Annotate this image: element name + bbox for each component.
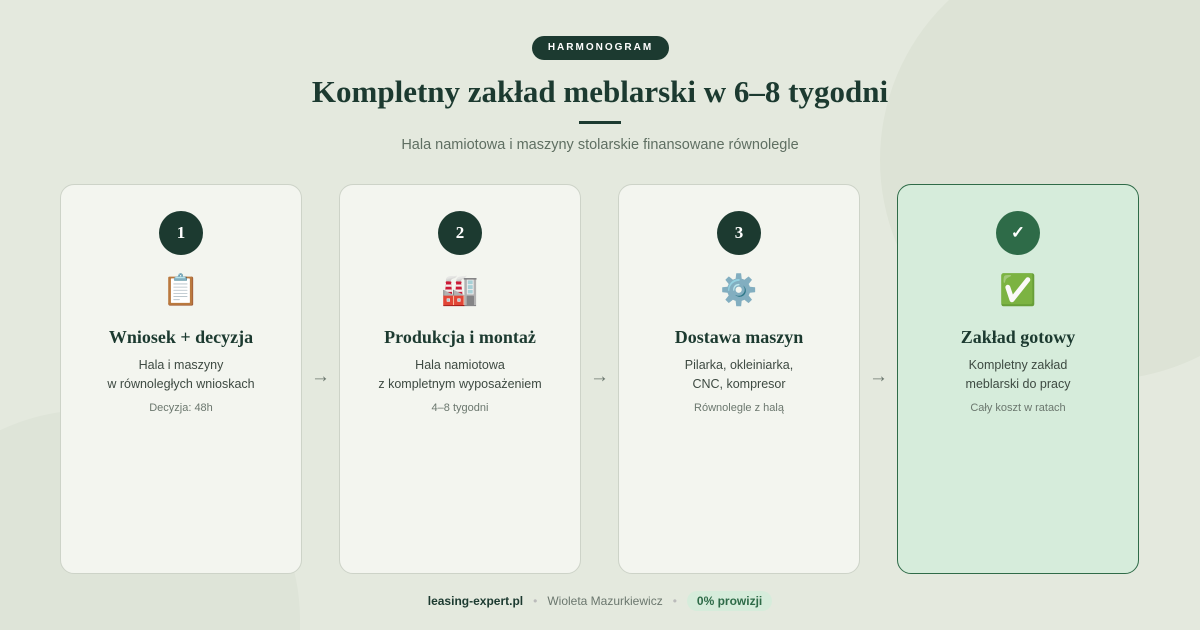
- badge: [532, 36, 669, 60]
- panel: step 3: Dostawa maszyn: [675, 327, 803, 347]
- panel: step 2: [339, 184, 581, 574]
- footer: [428, 591, 772, 611]
- panel: step 2: 4–8 tygodni: [432, 402, 488, 414]
- panel: step 3: 3: [735, 223, 743, 242]
- footer: leasing-expert.pl • Wioleta Mazurkiewicz •: [428, 594, 677, 608]
- panel: step 1: w równoległych wnioskach: [107, 377, 255, 391]
- arrow: →: [311, 366, 330, 387]
- panel: done: Zakład gotowy: [961, 327, 1075, 347]
- panel: step 2: 🏭: [441, 274, 479, 307]
- panel: step 2: Produkcja i montaż: [384, 327, 536, 347]
- footer: 0% prowizji: [697, 594, 762, 608]
- panel: step 3: ⚙️: [720, 274, 758, 307]
- badge: HARMONOGRAM: [548, 42, 653, 53]
- panel: done: meblarski do pracy: [966, 377, 1070, 391]
- subtitle: Hala namiotowa i maszyny stolarskie finansowane równolegle: [401, 137, 799, 153]
- panel: step 1: Decyzja: 48h: [149, 402, 213, 414]
- panel: step 1: 1: [177, 223, 185, 242]
- panel: step 1: Hala i maszyny: [139, 358, 223, 372]
- panel: step 2: Hala namiotowa: [415, 358, 505, 372]
- panel: step 3: [618, 184, 860, 574]
- panel: done: [897, 184, 1139, 574]
- panel: step 1: [60, 184, 302, 574]
- panel: step 1: Wniosek + decyzja: [109, 327, 253, 347]
- panel: done: ✓: [1011, 223, 1025, 242]
- panel: done: Cały koszt w ratach: [970, 402, 1066, 414]
- panel: step 2: z kompletnym wyposażeniem: [378, 377, 542, 391]
- panel: done: Kompletny zakład: [969, 358, 1067, 372]
- panel: step 3: Pilarka, okleiniarka,: [685, 358, 793, 372]
- panel: done: ✅: [999, 274, 1037, 307]
- arrow: →: [869, 366, 888, 387]
- panel: step 2: 2: [456, 223, 464, 242]
- title: Kompletny zakład meblarski w 6–8 tygodni: [312, 74, 888, 109]
- panel: step 1: 📋: [162, 274, 200, 307]
- arrow: →: [590, 366, 609, 387]
- panel: step 3: Równolegle z halą: [694, 402, 784, 414]
- panel: step 3: CNC, kompresor: [692, 377, 786, 391]
